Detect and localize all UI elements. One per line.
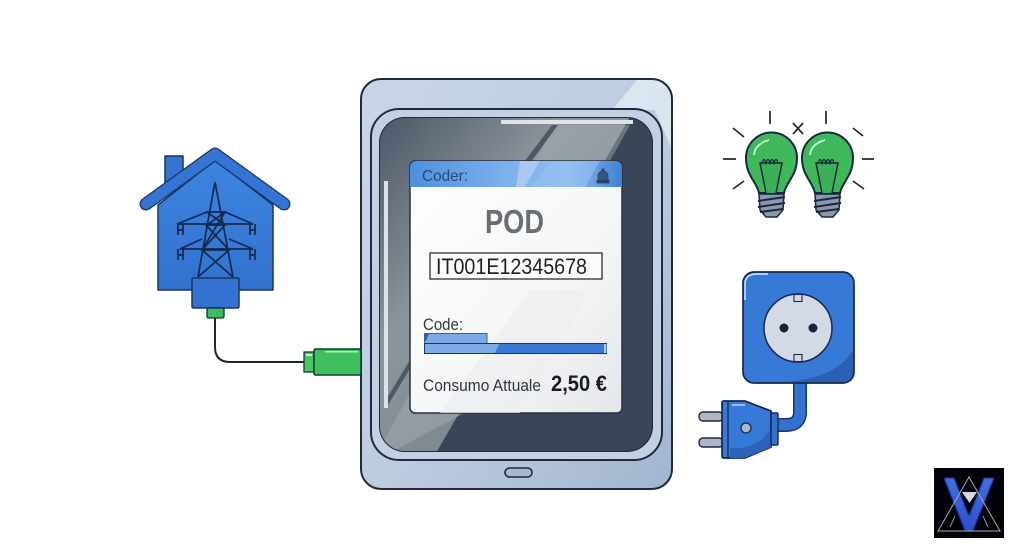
consumption label: Consumo Attuale xyxy=(423,377,541,395)
dark display area xyxy=(379,117,660,460)
screen glare xyxy=(440,412,520,413)
icon: bell xyxy=(597,169,609,183)
connector box xyxy=(192,278,239,308)
device body xyxy=(361,79,672,489)
green connector xyxy=(207,308,224,318)
consumption value: 2,50 € xyxy=(551,371,607,396)
pylon xyxy=(177,182,255,277)
right bulb xyxy=(802,133,853,217)
screen header bar xyxy=(410,161,622,187)
house body xyxy=(158,160,273,290)
device outline xyxy=(361,79,672,489)
plug pins xyxy=(699,412,723,421)
progress bars xyxy=(424,334,606,354)
light rays xyxy=(723,111,874,189)
icon: two green light bulbs xyxy=(723,111,874,217)
left bulb xyxy=(746,133,797,217)
code label: Code: xyxy=(423,315,463,334)
socket face xyxy=(764,294,832,362)
body glare xyxy=(612,79,672,150)
roof xyxy=(146,154,284,204)
socket plate xyxy=(743,272,854,383)
highlight strips xyxy=(501,120,633,124)
icon: house with pylon xyxy=(146,154,284,318)
home button xyxy=(505,468,532,477)
panel: tablet meter device xyxy=(361,79,672,489)
heading: POD: POD xyxy=(485,203,544,240)
header label: Coder: xyxy=(422,168,468,185)
icon: wall socket with plug xyxy=(699,272,854,458)
screen background xyxy=(410,161,622,413)
cable xyxy=(776,382,800,425)
panel: device screen xyxy=(410,161,622,413)
plug body xyxy=(722,401,771,458)
cable xyxy=(215,318,304,362)
chimney xyxy=(165,156,183,185)
POD code box: IT001E12345678 xyxy=(436,254,587,279)
bezel xyxy=(371,109,662,460)
logo xyxy=(934,468,1004,538)
icon: green USB connector xyxy=(304,349,361,375)
